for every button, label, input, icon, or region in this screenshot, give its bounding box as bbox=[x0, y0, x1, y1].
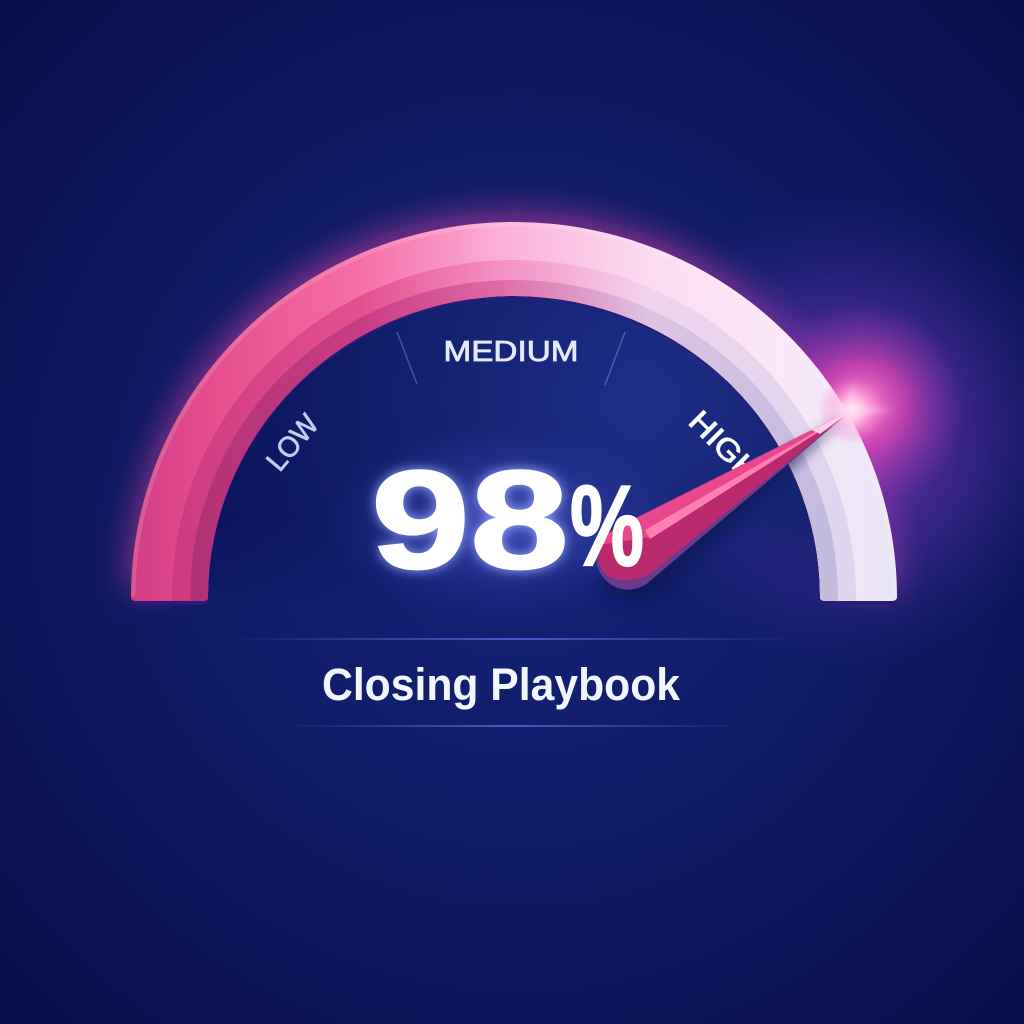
arc bands bbox=[120, 210, 910, 610]
needle rim bbox=[596, 410, 852, 590]
number digits: 98 bbox=[371, 441, 569, 598]
title: Closing Playbook bbox=[322, 659, 681, 710]
tick: low-medium bbox=[397, 332, 417, 384]
purple glow behind gauge bbox=[150, 190, 1024, 670]
needle shadow bbox=[596, 410, 852, 601]
label: MEDIUM: MEDIUM bbox=[444, 336, 578, 368]
divider: lower bbox=[280, 725, 745, 727]
needle highlight bbox=[645, 412, 850, 539]
number glow: 98 bbox=[371, 441, 569, 598]
label: LOW: LOW bbox=[260, 408, 326, 478]
label: HIGH: HIGH bbox=[682, 405, 766, 489]
tick: medium-high bbox=[605, 332, 625, 385]
percent sign: % bbox=[570, 463, 644, 590]
arc shadow edge bbox=[131, 224, 897, 605]
needle bbox=[596, 410, 852, 601]
needle upper facet bbox=[600, 410, 852, 545]
value: 98% bbox=[371, 441, 644, 598]
gauge arc bbox=[120, 210, 910, 610]
tip flare bbox=[812, 376, 896, 444]
glow behind number bbox=[320, 422, 690, 622]
dial face bbox=[214, 298, 818, 573]
divider: upper bbox=[230, 638, 800, 640]
needle body bbox=[599, 410, 852, 580]
